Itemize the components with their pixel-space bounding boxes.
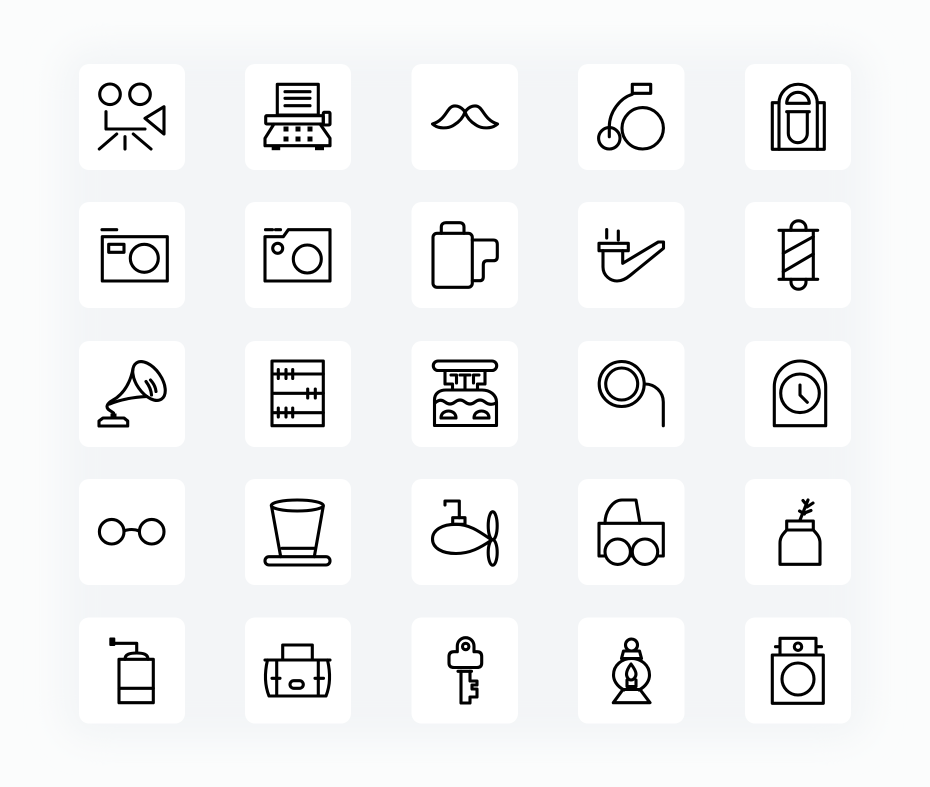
icon: jukebox bbox=[772, 84, 824, 149]
icon: mantel clock bbox=[774, 361, 826, 426]
icon: plant jar bbox=[780, 500, 820, 564]
icon card: pince-nez glasses bbox=[79, 479, 185, 585]
icon card: film roll bbox=[412, 202, 518, 308]
icon card: plant jar bbox=[745, 479, 851, 585]
icon: instant camera bbox=[265, 230, 330, 281]
icon: abacus bbox=[272, 361, 323, 426]
icon card: compact camera bbox=[79, 202, 185, 308]
icon: monocle bbox=[599, 362, 663, 426]
icon: barber pole bbox=[779, 221, 818, 289]
icon card: jukebox bbox=[745, 64, 851, 170]
icon: box camera bbox=[772, 638, 823, 703]
icon card: smoking pipe bbox=[578, 202, 684, 308]
icon: toy truck bbox=[599, 500, 663, 564]
icon card: abacus bbox=[245, 341, 351, 447]
icon card: monocle bbox=[578, 341, 684, 447]
icon: moustache bbox=[432, 106, 498, 128]
icon: typewriter bbox=[265, 84, 330, 150]
icon: travel bag bbox=[265, 645, 330, 696]
icon card: oil lantern bbox=[578, 618, 684, 724]
icon card: barber pole bbox=[745, 202, 851, 308]
icon: submarine bbox=[432, 501, 497, 565]
icon: film roll bbox=[433, 223, 497, 287]
icon card: box camera bbox=[745, 618, 851, 724]
icon card: moustache bbox=[412, 64, 518, 170]
icon card: coffee grinder bbox=[79, 618, 185, 724]
icon card: film camera bbox=[79, 64, 185, 170]
icon: smoking pipe bbox=[599, 230, 664, 281]
icon card: submarine bbox=[412, 479, 518, 585]
icon: pince-nez glasses bbox=[99, 519, 164, 544]
icon card: penny-farthing bbox=[578, 64, 684, 170]
icon: film camera bbox=[99, 84, 164, 149]
icon: top hat bbox=[265, 500, 330, 565]
icon: oil lantern bbox=[613, 639, 650, 703]
icon: kitchen scale bbox=[433, 361, 497, 426]
icon card: mantel clock bbox=[745, 341, 851, 447]
icon: gramophone bbox=[99, 356, 172, 426]
icon: penny-farthing bbox=[599, 84, 663, 149]
icon: key bbox=[449, 638, 482, 703]
icon card: instant camera bbox=[245, 202, 351, 308]
icon: coffee grinder bbox=[109, 638, 153, 703]
icon card: toy truck bbox=[578, 479, 684, 585]
icon card: gramophone bbox=[79, 341, 185, 447]
icon card: typewriter bbox=[245, 64, 351, 170]
icon card: kitchen scale bbox=[412, 341, 518, 447]
icon card: key bbox=[412, 618, 518, 724]
icon card: travel bag bbox=[245, 618, 351, 724]
icon card: top hat bbox=[245, 479, 351, 585]
icon: compact camera bbox=[102, 230, 167, 281]
